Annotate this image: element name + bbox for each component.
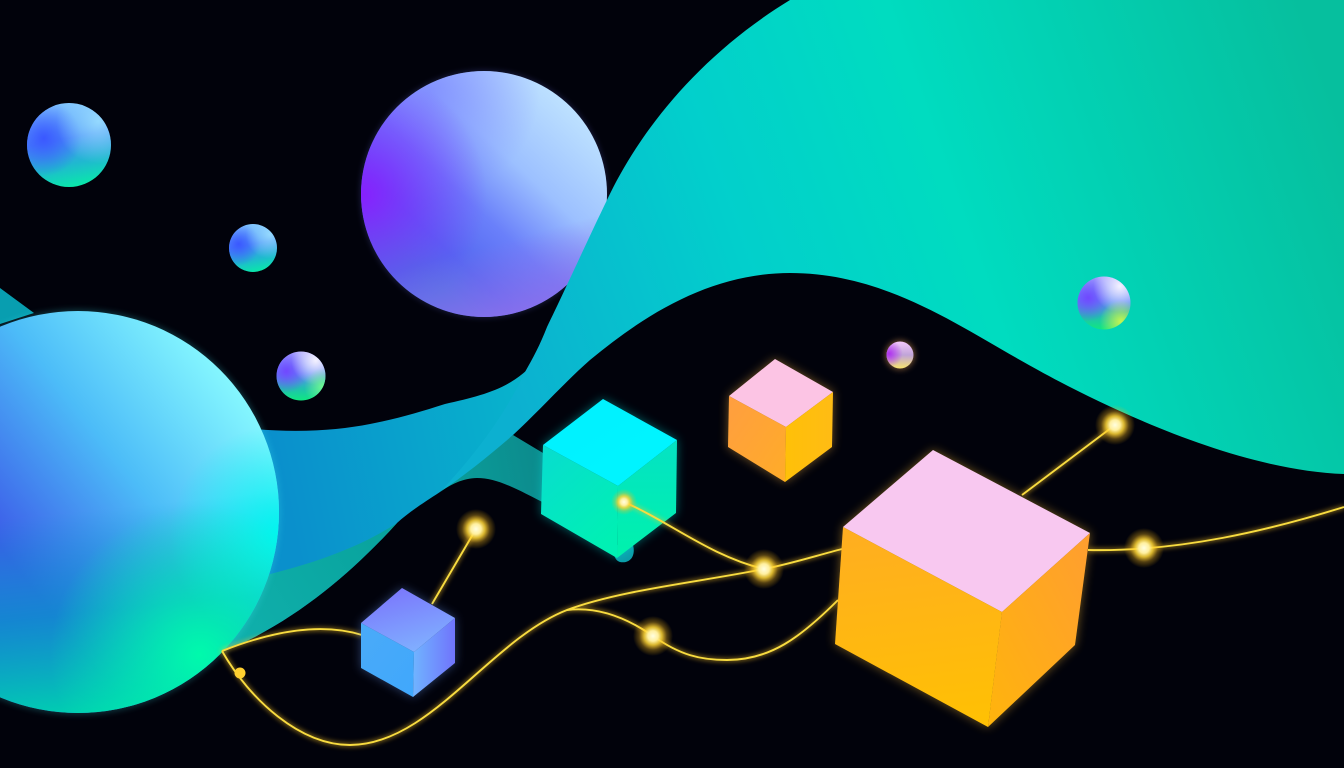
connector lines glow [222, 425, 1344, 745]
pink and orange small cube [728, 359, 833, 482]
small sphere center [229, 224, 277, 272]
tiny iridescent sphere [885, 340, 915, 370]
iridescent sphere right [1078, 276, 1130, 330]
connector lines [222, 425, 1344, 745]
purple sphere [360, 70, 608, 318]
teal tab below cube [612, 545, 634, 562]
small sphere top left [27, 103, 111, 187]
large sphere left [0, 309, 281, 715]
dark teal fold [440, 435, 548, 505]
glowing nodes [234, 405, 1164, 678]
blue cube [361, 588, 455, 697]
teal band under ribbon [200, 523, 397, 668]
lower blue ribbon [180, 370, 530, 668]
left corner wave fragment [0, 288, 34, 324]
large teal wave [440, 0, 1344, 492]
large pink and orange cube [835, 450, 1090, 727]
connector from teal cube [624, 502, 764, 569]
iridescent sphere lower [276, 352, 326, 400]
teal cube [541, 399, 677, 558]
